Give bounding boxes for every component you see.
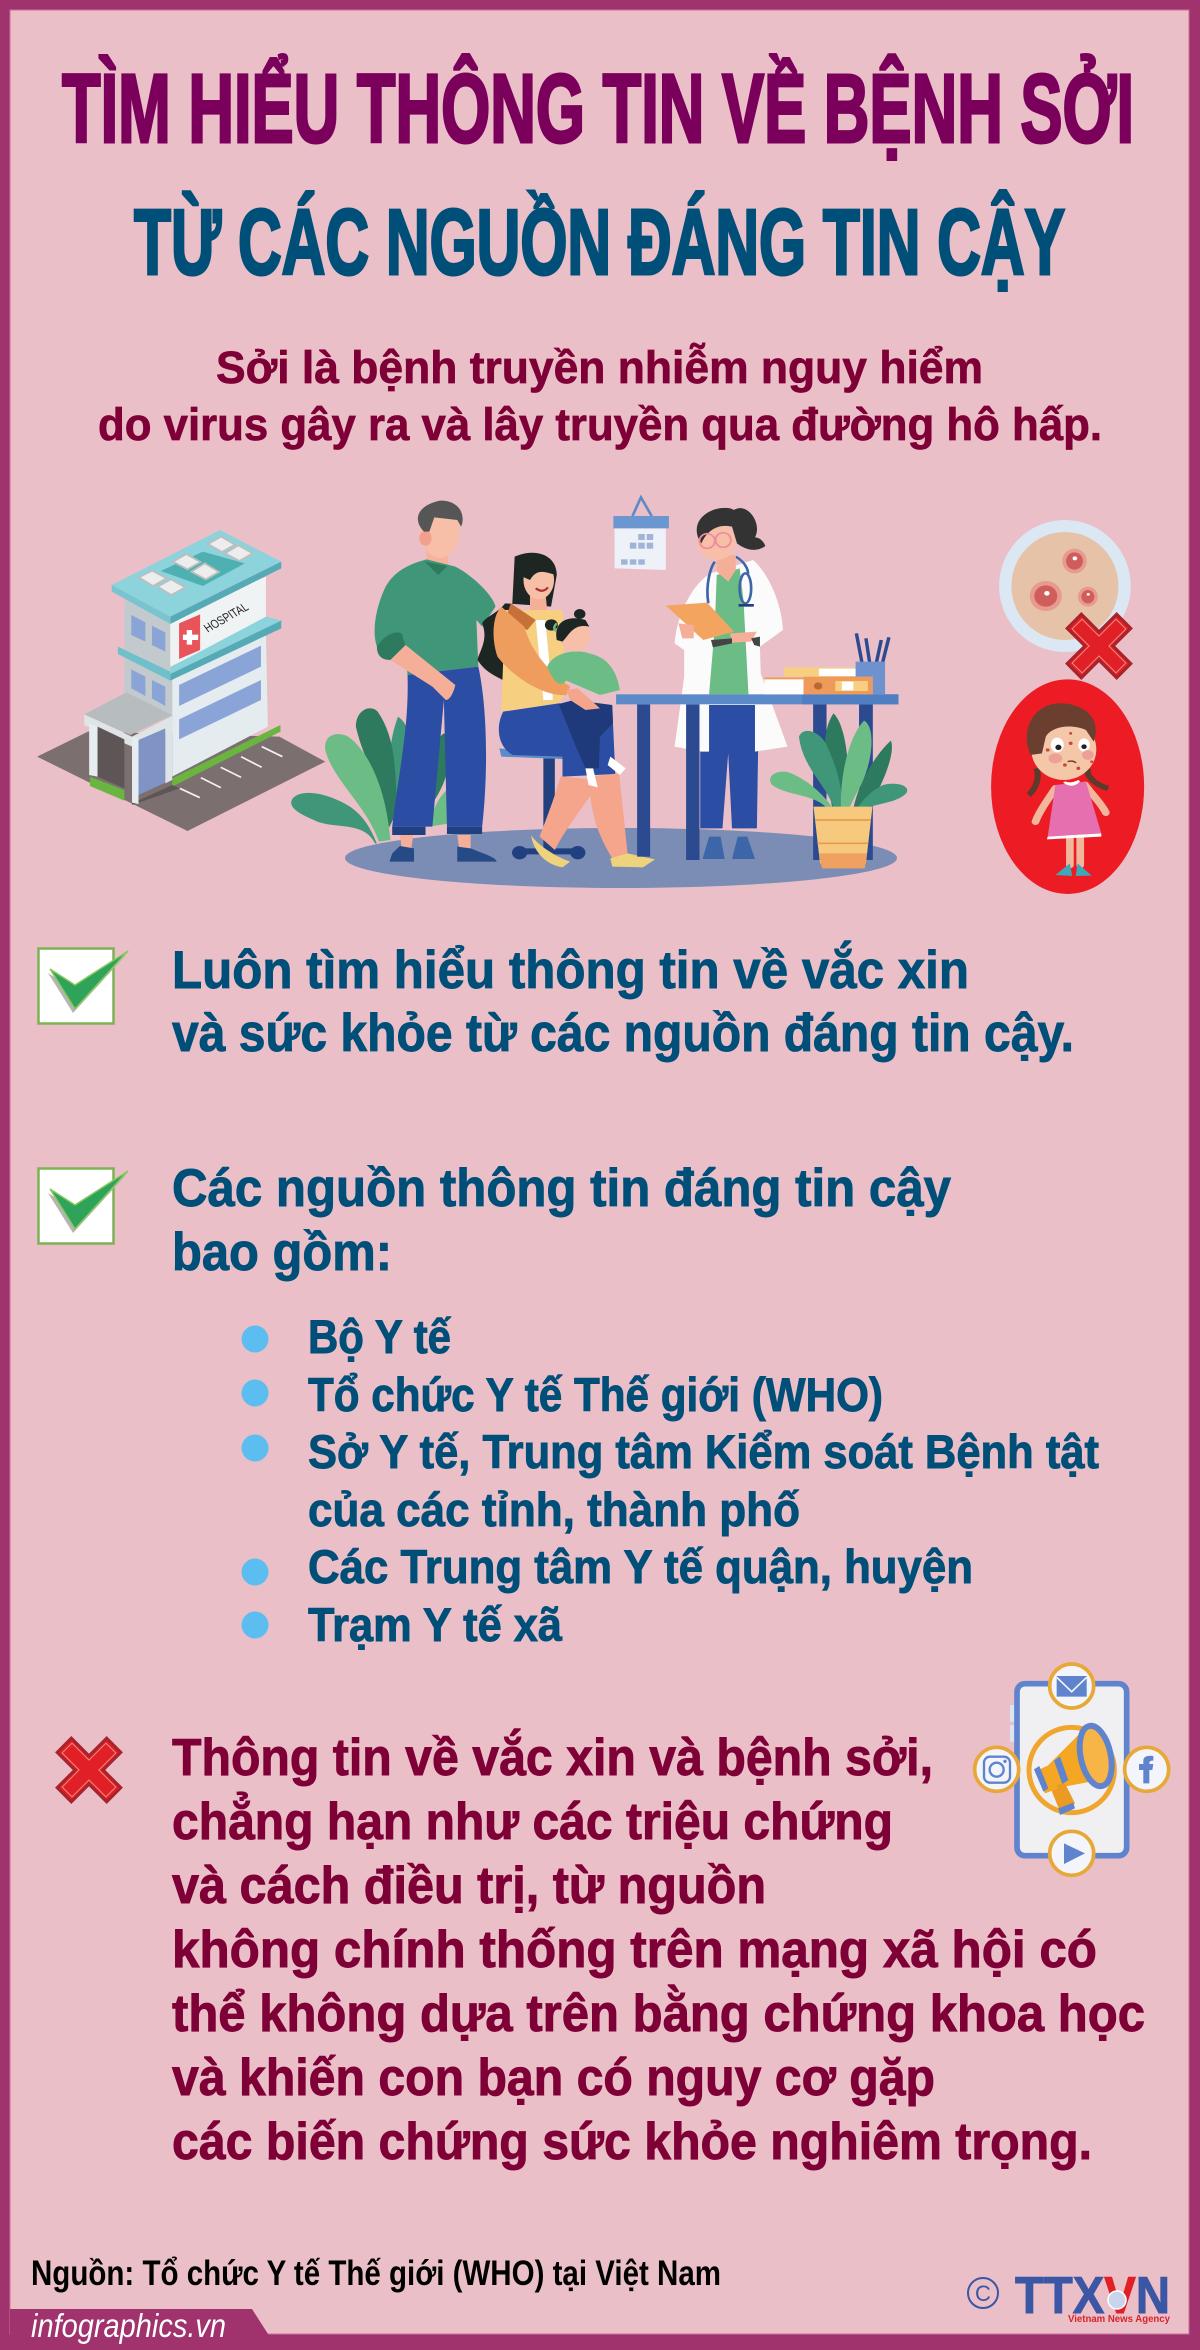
illustration: potted plant — [770, 713, 907, 868]
icon: red cross — [40, 1721, 138, 1819]
list of trusted sources: Tổ chức Y tế Thế giới (WHO) — [308, 1368, 883, 1421]
icon: skin rash circle — [999, 520, 1131, 652]
source line: Nguồn: Tổ chức Y tế Thế giới (WHO) tại Việt Nam — [31, 2254, 721, 2293]
check item 1: Luôn tìm hiểu thông tin về vắc xin — [172, 940, 969, 1000]
warning text block: Thông tin về vắc xin và bệnh sởi, — [172, 1728, 933, 1787]
warning text block — [172, 1728, 1145, 2171]
logo: TTXVN: C — [975, 2281, 991, 2306]
icon: red cross mark — [1050, 597, 1148, 695]
illustration: mother and chair — [478, 553, 655, 867]
intro text: Sởi là bệnh truyền nhiễm nguy hiểm — [216, 342, 983, 393]
list of trusted sources: Bộ Y tế — [308, 1310, 452, 1363]
check item 2 — [38, 1159, 951, 1282]
check item 2: bao gồm: — [172, 1223, 392, 1282]
footer tab: infographics.vn: infographics.vn — [31, 2307, 226, 2344]
warning text block: không chính thống trên mạng xã hội có — [172, 1921, 1097, 1979]
list of trusted sources: Trạm Y tế xã — [308, 1598, 563, 1651]
logo: TTXVN: TTXVN — [1015, 2267, 1170, 2325]
illustration: floor shadow — [345, 828, 897, 888]
list of trusted sources: Các Trung tâm Y tế quận, huyện — [308, 1540, 973, 1593]
check item 2: Các nguồn thông tin đáng tin cậy — [172, 1159, 951, 1218]
intro text: do virus gây ra và lây truyền qua đường hô hấp. — [98, 399, 1102, 450]
illustration: left plant — [291, 708, 450, 843]
list of trusted sources: của các tỉnh, thành phố — [308, 1483, 800, 1536]
title — [62, 54, 1134, 294]
illustration: hospital building: HOSPITAL — [201, 600, 251, 635]
illustration: father — [375, 501, 497, 862]
illustration: doctor — [666, 508, 787, 859]
illustration: desk with books and pens — [616, 633, 898, 860]
check item 1: và sức khỏe từ các nguồn đáng tin cậy. — [172, 1004, 1074, 1063]
intro text — [98, 342, 1102, 450]
icon: checkbox — [38, 948, 128, 1024]
warning text block: chẳng hạn như các triệu chứng — [172, 1792, 893, 1851]
icon: social media phone with megaphone — [975, 1664, 1169, 1875]
logo: TTXVN: Vietnam News Agency — [1068, 2313, 1170, 2325]
warning text block: thể không dựa trên bằng chứng khoa học — [172, 1984, 1145, 2043]
warning text block: các biến chứng sức khỏe nghiêm trọng. — [172, 2113, 1092, 2171]
icon: checkbox — [38, 1168, 128, 1244]
illustration: wall calendar — [613, 497, 669, 570]
illustration: hospital building — [37, 530, 325, 831]
warning text block: và cách điều trị, từ nguồn — [172, 1857, 766, 1915]
check item 1 — [38, 940, 1074, 1063]
list of trusted sources: Sở Y tế, Trung tâm Kiểm soát Bệnh tật — [308, 1425, 1099, 1478]
illustration: child — [545, 609, 626, 787]
icon: child with measles rash — [991, 679, 1144, 894]
list of trusted sources — [242, 1310, 1099, 1651]
warning text block: và khiến con bạn có nguy cơ gặp — [172, 2049, 935, 2107]
